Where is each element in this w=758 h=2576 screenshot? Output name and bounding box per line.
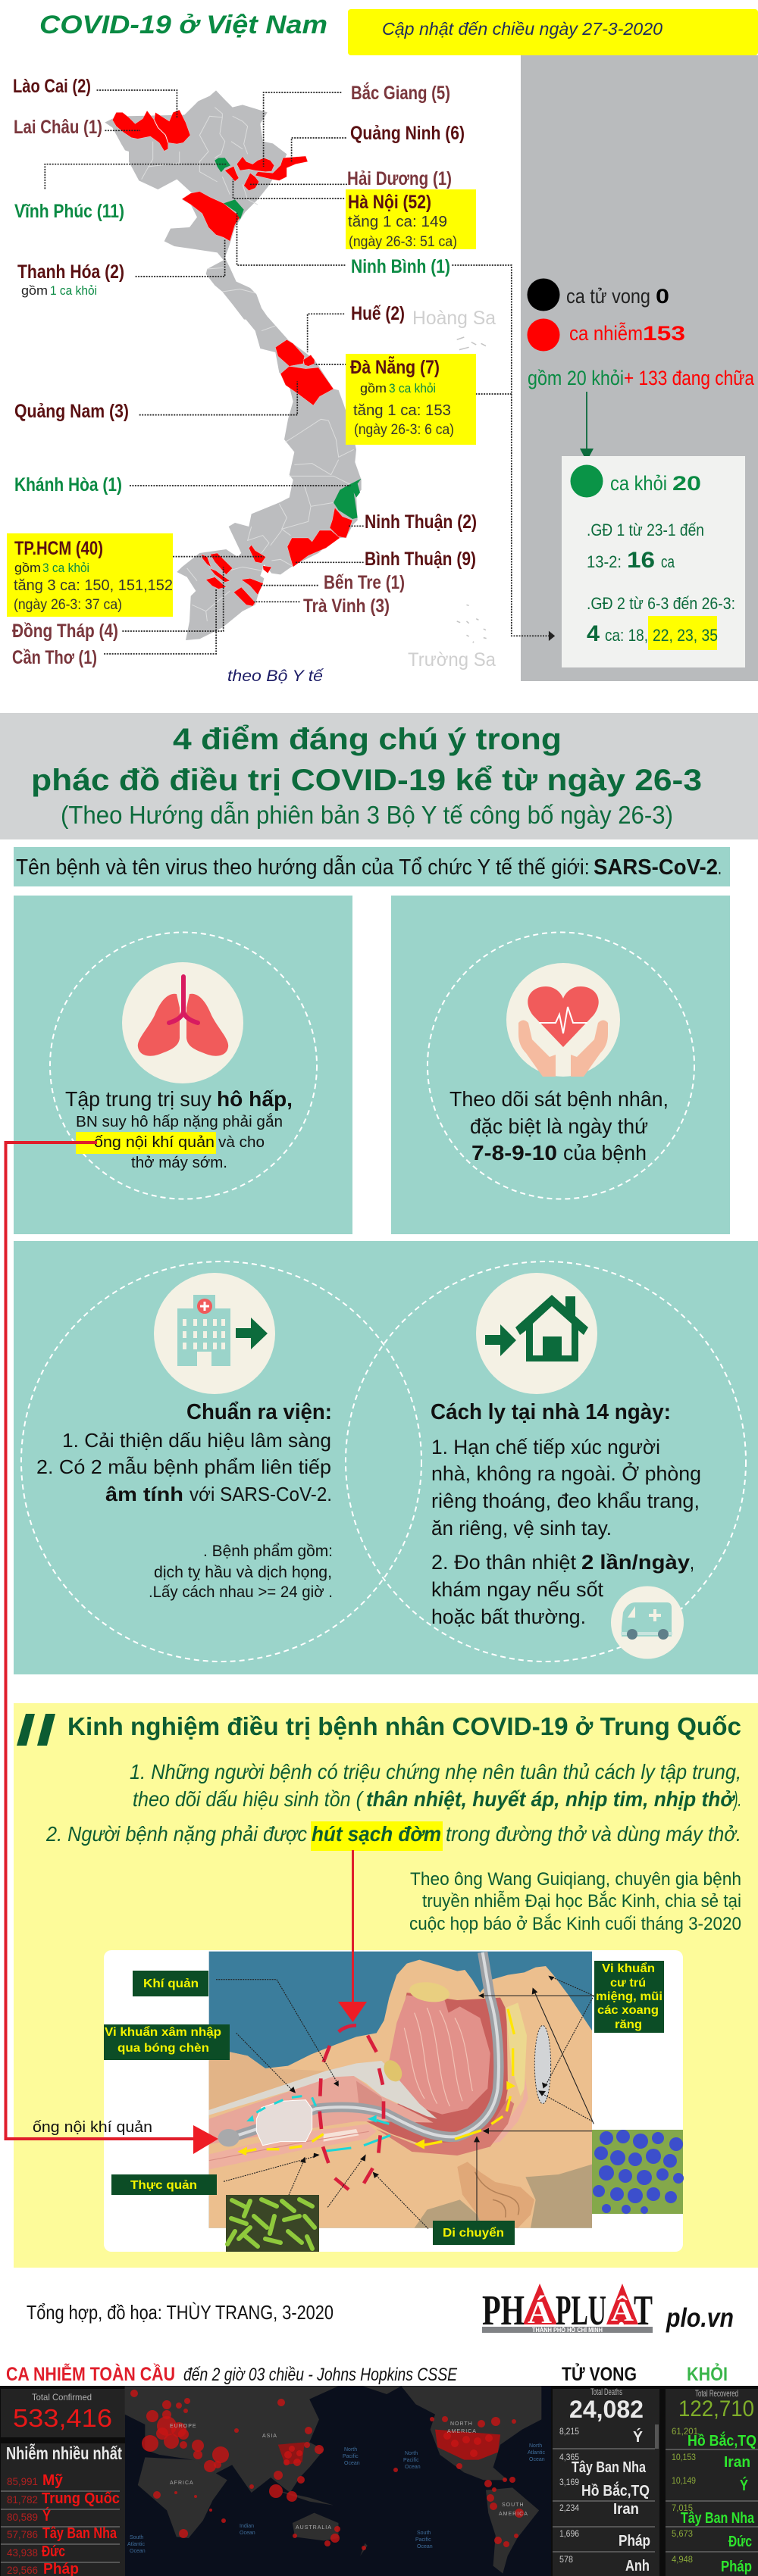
panel: most infected: Mỹ	[42, 2472, 64, 2489]
epiglottis and cartilage	[209, 2061, 437, 2119]
world map: SOUTH	[502, 2503, 525, 2508]
panel: total confirmed: 533,416	[13, 2404, 112, 2432]
callout: TP.HCM: tăng 3 ca: 150, 151,152	[14, 577, 173, 594]
panel: total recovered	[666, 2388, 758, 2576]
map of Vietnam: north	[105, 90, 308, 320]
label: Quảng Nam: Quảng Nam (3)	[14, 401, 129, 422]
callout: Đà Nẵng: tăng 1 ca: 153	[353, 402, 451, 419]
label: Bắc Giang: Bắc Giang (5)	[351, 81, 450, 104]
world map: NORTH	[450, 2421, 473, 2427]
label: Vi khuẩn cư trú: miệng, mũi	[596, 1990, 662, 2003]
world map: Ocean	[529, 2457, 545, 2462]
text: discharge standard: .Lấy cách nhau >= 24 giờ .	[149, 1583, 333, 1601]
text: discharge standard: Chuẩn ra viện:	[186, 1400, 332, 1424]
label: Di chuyển: Di chuyển	[443, 2226, 504, 2240]
panel: total deaths: Iran	[613, 2501, 639, 2518]
text: respiratory failure: và cho	[218, 1134, 265, 1151]
logo: Pháp Luật: Á	[528, 2295, 553, 2331]
text: monitoring: 7-8-9-10	[471, 1141, 557, 1165]
logo: Pháp Luật: THÀNH PHỐ HỒ CHÍ MINH	[532, 2326, 603, 2334]
callout: TP.HCM: (ngày 26-3: 37 ca)	[14, 597, 122, 613]
panel: recovered cases: 13-2:	[587, 552, 622, 571]
panel: total confirmed: Total Confirmed	[32, 2392, 92, 2402]
label: Ninh Bình: Ninh Bình (1)	[351, 256, 450, 277]
text: respiratory failure	[65, 1087, 293, 1171]
text: discharge standard: 2. Có 2 mẫu bệnh phẩm liên tiếp	[36, 1455, 331, 1478]
label: Khí quản	[133, 1971, 208, 1996]
diagram: airway anatomy	[209, 1952, 594, 2229]
label: Vi khuẩn cư trú: cư trú	[610, 1977, 646, 1990]
callout: Đà Nẵng: 3 ca khỏi	[389, 381, 436, 395]
panel: total deaths: 3,169	[559, 2477, 579, 2487]
logo: Pháp Luật: PH	[482, 2287, 525, 2334]
panel: recovered cases: .GĐ 2 từ 6-3 đến 26-3:	[587, 594, 735, 613]
panel: total deaths: 2,234	[559, 2503, 579, 2513]
logo: Pháp Luật: Ậ	[611, 2296, 634, 2327]
panel: most infected: 57,786	[7, 2528, 38, 2540]
icon: hospital with arrow	[177, 1295, 268, 1366]
icon: ambulance	[611, 1587, 684, 1659]
world map: South	[130, 2535, 143, 2540]
tube cuff	[256, 2100, 312, 2146]
label: Thanh Hóa	[17, 261, 124, 298]
icon: arrow into house	[485, 1295, 588, 1361]
label: Vi khuẩn cư trú: răng	[615, 2018, 642, 2031]
world map: AMERICA	[447, 2429, 477, 2434]
text: monitoring: của bệnh	[563, 1141, 647, 1165]
label: Vi khuẩn cư trú: Vi khuẩn	[602, 1962, 655, 1975]
callout: TP.HCM: gồm	[14, 561, 41, 575]
world map: North	[344, 2447, 357, 2453]
panel: most infected: 81,782	[7, 2493, 38, 2506]
title: COVID-19 ở Việt Nam	[39, 11, 327, 39]
pointer lines	[216, 1976, 594, 2229]
world map: Ocean	[130, 2549, 146, 2554]
panel: most infected: Tây Ban Nha	[42, 2525, 117, 2542]
panel: total recovered: 10,153	[672, 2452, 696, 2462]
world map: North	[529, 2443, 542, 2449]
callout: Đà Nẵng: gồm	[360, 381, 387, 395]
panel: recovered cases	[562, 456, 745, 667]
world map: Atlantic	[127, 2542, 145, 2547]
label: Trà Vinh: Trà Vinh (3)	[303, 596, 390, 617]
panel: total deaths: Ý	[633, 2428, 644, 2446]
world map: ASIA	[262, 2434, 277, 2439]
image: blue bacteria	[592, 2130, 684, 2214]
update date banner	[348, 9, 758, 55]
label: Cần Thơ: Cần Thơ (1)	[12, 647, 97, 668]
panel: total recovered: Ý	[740, 2476, 749, 2494]
panel: recovered cases: 16	[627, 548, 655, 573]
grey side panel	[521, 55, 758, 681]
panel: most infected	[1, 2443, 125, 2576]
text: source expert: truyền nhiễm Đại học Bắc Kinh, chia sẻ tại	[422, 1891, 741, 1912]
teal bar: disease name: Tên bệnh và tên virus theo hướng dẫn của Tổ chức Y tế thế giới:	[16, 855, 590, 880]
text: home isolation: nhà, không ra ngoài. Ở phòng	[431, 1461, 701, 1485]
panel: total recovered: 5,673	[672, 2528, 693, 2539]
label: Vi khuẩn xâm nhập	[104, 2024, 230, 2060]
case breakdown	[528, 367, 755, 389]
panel: most infected: Trung Quốc	[42, 2490, 120, 2507]
logo: Pháp Luật: PLU	[556, 2287, 606, 2334]
text: home isolation	[431, 1400, 701, 1628]
teal bar: disease name: .	[718, 855, 722, 880]
text: home isolation: hoặc bất thường.	[431, 1605, 586, 1628]
panel: most infected: Nhiễm nhiều nhất	[6, 2443, 122, 2463]
label: Vi khuẩn xâm nhập: Vi khuẩn xâm nhập	[105, 2025, 221, 2039]
text: home isolation: 2. Đo thân nhiệt	[431, 1551, 576, 1574]
arrow: to recovered box	[580, 392, 594, 461]
panel: most infected: Đức	[42, 2543, 65, 2560]
panel: total recovered: 10,149	[672, 2475, 696, 2486]
tongue	[389, 1995, 490, 2115]
arrow: red line from suction text to diagram	[338, 1850, 367, 2022]
legend: deaths	[528, 279, 669, 311]
text: home isolation: ,	[690, 1551, 694, 1574]
panel: most infected: 43,938	[7, 2546, 38, 2559]
world map	[125, 2386, 551, 2576]
label: Bình Thuận: Bình Thuận (9)	[365, 549, 476, 570]
world map: North	[405, 2451, 418, 2456]
image: green bacteria	[226, 2195, 319, 2252]
panel: total recovered: 4,948	[672, 2554, 693, 2565]
text: discharge standard: âm tính	[105, 1483, 183, 1505]
panel: recovered cases: .GĐ 1 từ 23-1 đến	[587, 521, 704, 539]
text: recommendations	[45, 1760, 741, 1851]
callout: TP.HCM: 3 ca khỏi	[42, 561, 89, 575]
panel: patient monitoring	[391, 896, 730, 1234]
label: Trường Sa: Trường Sa	[408, 649, 496, 671]
world map: South	[417, 2531, 431, 2536]
panel: recovered cases: 20	[672, 472, 701, 495]
label: Khánh Hòa: Khánh Hòa (1)	[14, 474, 122, 496]
red dashed suction ring	[320, 2025, 384, 2190]
callout: Hà Nội: Hà Nội (52)	[348, 192, 431, 213]
hair	[415, 2165, 592, 2228]
label: Huế: Huế (2)	[351, 303, 405, 324]
panel: total deaths: Pháp	[619, 2533, 650, 2549]
panel: respiratory treatment	[14, 896, 352, 1234]
panel: total deaths: Anh	[625, 2558, 650, 2574]
text: recommendations: 2. Người bệnh nặng phải được	[45, 1822, 307, 1846]
text: discharge standard: với SARS-CoV-2.	[190, 1483, 332, 1505]
text: discharge standard: 1. Cải thiện dấu hiệu lâm sàng	[62, 1429, 331, 1452]
yellow flow arrows	[246, 2009, 514, 2151]
world map: Pacific	[343, 2454, 359, 2459]
callout: TP.HCM: TP.HCM (40)	[14, 538, 103, 559]
world map: AUSTRALIA	[296, 2525, 332, 2531]
panel: total recovered: Iran	[724, 2454, 750, 2471]
panel: recovered cases: ca khỏi	[610, 472, 667, 495]
panel: recovered cases: ca	[661, 552, 675, 571]
text: respiratory failure: Tập trung trị suy	[65, 1087, 211, 1111]
panel: total deaths: 8,215	[559, 2426, 579, 2437]
panel: total recovered: Pháp	[721, 2559, 752, 2575]
label: Ninh Thuận: Ninh Thuận (2)	[365, 511, 477, 533]
panel: Vietnam map section	[7, 9, 758, 685]
callout: TP.HCM	[7, 533, 173, 617]
panel: total deaths: Total Deaths	[590, 2387, 622, 2397]
label: Đồng Tháp: Đồng Tháp (4)	[12, 621, 118, 642]
callout: Hà Nội	[346, 189, 476, 250]
credit line: Tổng hợp, đồ họa: THÙY TRANG, 3-2020	[27, 2301, 334, 2324]
world map: Pacific	[415, 2537, 431, 2543]
text: home isolation: khám ngay nếu sốt	[431, 1578, 603, 1601]
text: respiratory failure: BN suy hô hấp nặng phải gắn	[76, 1113, 283, 1130]
logo: Pháp Luật: T	[634, 2287, 653, 2334]
panel: total deaths: Hồ Bắc,TQ	[581, 2481, 650, 2499]
panel: discharge and home isolation	[14, 1241, 758, 1674]
panel: total deaths: 578	[559, 2554, 573, 2565]
panel: most infected: 85,991	[7, 2475, 38, 2487]
sinus	[534, 2025, 551, 2104]
world map: Indian	[240, 2524, 254, 2529]
text: recommendations: thân nhiệt, huyết áp, nhịp tim, nhịp thở	[366, 1787, 736, 1811]
text: recommendations: ).	[732, 1787, 741, 1811]
world map: Ocean	[405, 2465, 421, 2470]
case breakdown: gồm 20 khỏi	[528, 367, 624, 389]
label: Thực quản: Thực quản	[130, 2179, 197, 2192]
world map: Ocean	[240, 2531, 255, 2536]
map of Vietnam: south	[177, 317, 362, 640]
label: Quảng Ninh: Quảng Ninh (6)	[350, 123, 465, 144]
text: recommendations: hút sạch đờm	[312, 1822, 441, 1846]
icon: heart in hands	[518, 986, 608, 1077]
text: monitoring: Theo dõi sát bệnh nhân,	[449, 1087, 669, 1111]
heading: global cases	[6, 2362, 728, 2385]
callout: Hà Nội: tăng 1 ca: 149	[348, 214, 447, 230]
source note: theo Bộ Y tế	[227, 667, 324, 685]
label: Thực quản	[111, 2174, 217, 2195]
panel: most infected: 80,589	[7, 2511, 38, 2523]
text: respiratory failure: ống nội khí quản	[94, 1134, 215, 1151]
label: Lào Cai: Lào Cai (2)	[13, 76, 91, 97]
panel: recovered cases: 22, 23, 35	[653, 626, 718, 645]
label: Hải Dương: Hải Dương (1)	[347, 168, 452, 189]
panel: total deaths	[553, 2387, 659, 2576]
ear	[457, 2162, 534, 2228]
text: source expert	[409, 1869, 741, 1934]
heading band: 4 key points: phác đồ điều trị COVID-19 kể từ ngày 26-3	[31, 764, 702, 797]
trachea lumen	[209, 2076, 434, 2144]
esophagus	[209, 2124, 377, 2169]
text: monitoring: đặc biệt là ngày thứ	[470, 1114, 648, 1138]
world map: Atlantic	[528, 2450, 545, 2456]
map labels	[7, 76, 496, 685]
panel: total recovered: Đức	[728, 2534, 752, 2550]
teal bar: disease name: SARS-CoV-2	[594, 855, 718, 880]
panel: recovered cases: 4	[587, 621, 600, 646]
world map: EUROPE	[170, 2424, 197, 2429]
spine and palate	[506, 2002, 527, 2096]
heading: global cases: CA NHIỄM TOÀN CẦU	[6, 2362, 175, 2385]
text: respiratory failure: thở máy sớm.	[131, 1155, 227, 1171]
panel: China treatment experience	[14, 1703, 758, 2268]
legend: infected: 153	[643, 322, 685, 345]
arrow: red line from tube text to diagram	[6, 1143, 218, 2154]
callout: Hà Nội: (ngày 26-3: 51 ca)	[349, 234, 457, 250]
logo: plo.vn: plo.vn	[666, 2303, 734, 2333]
panel: total deaths: 4,365	[559, 2452, 579, 2462]
text: home isolation: ăn riêng, vệ sinh tay.	[431, 1517, 612, 1540]
panel: total recovered: 7,015	[672, 2503, 693, 2513]
label: Vi khuẩn xâm nhập: qua bóng chèn	[117, 2042, 209, 2055]
label: Vi khuẩn cư trú: các xoang	[597, 2004, 659, 2017]
teal bar: disease name	[14, 847, 730, 886]
label: Thanh Hóa: gồm	[21, 283, 48, 298]
panel: total recovered: 61,201	[672, 2426, 698, 2437]
label: tube: ống nội khí quản	[33, 2119, 152, 2136]
dashboard: Johns Hopkins	[0, 2386, 758, 2576]
panel: total deaths: 1,696	[559, 2528, 579, 2539]
heading: global cases: TỬ VONG	[562, 2362, 637, 2385]
label: Lai Châu: Lai Châu (1)	[14, 117, 102, 138]
panel: total confirmed	[1, 2389, 125, 2437]
text: home isolation: riêng thoáng, đeo khẩu trang,	[431, 1490, 700, 1512]
callout: Đà Nẵng	[346, 354, 476, 445]
label: Di chuyển	[433, 2221, 515, 2245]
heading: global cases: đến 2 giờ 03 chiều - Johns Hopkins CSSE	[183, 2365, 458, 2385]
world map: AFRICA	[170, 2481, 194, 2486]
legend: infected: ca nhiễm	[569, 321, 643, 345]
heading band: 4 key points: 4 điểm đáng chú ý trong	[173, 723, 562, 756]
text: source expert: Theo ông Wang Guiqiang, chuyên gia bệnh	[410, 1869, 741, 1890]
text: discharge standard: dịch tỵ hầu và dịch họng,	[154, 1564, 332, 1581]
legend: deaths: ca tử vong	[566, 285, 650, 308]
text: discharge standard	[36, 1400, 333, 1601]
icon: lungs	[138, 977, 228, 1056]
icon: quote marks	[17, 1714, 55, 1746]
legend: deaths: 0	[656, 285, 669, 308]
text: home isolation: 2 lần/ngày	[581, 1551, 690, 1574]
label: Hoàng Sa: Hoàng Sa	[412, 308, 496, 329]
heading band: 4 key points	[0, 713, 758, 839]
legend: infected	[528, 318, 685, 352]
text: discharge standard: . Bệnh phẩm gồm:	[203, 1543, 333, 1560]
panel: total deaths: Tây Ban Nha	[572, 2459, 647, 2476]
text: recommendations: theo dõi dấu hiệu sinh tồn (	[133, 1787, 364, 1811]
panel: most infected: 29,566	[7, 2564, 38, 2576]
label: Vĩnh Phúc: Vĩnh Phúc (11)	[14, 201, 124, 222]
label: Khí quản: Khí quản	[143, 1977, 199, 1990]
world map: Ocean	[417, 2544, 433, 2549]
throat cavity	[366, 1993, 508, 2146]
update date banner: Cập nhật đến chiều ngày 27-3-2020	[382, 19, 662, 39]
text: monitoring	[449, 1087, 669, 1165]
label: Thanh Hóa: 1 ca khỏi	[50, 283, 97, 298]
text: home isolation: 1. Hạn chế tiếp xúc người	[431, 1436, 660, 1458]
panel: recovered cases: ca: 18,	[605, 626, 648, 645]
callout: Đà Nẵng: Đà Nẵng (7)	[350, 355, 440, 378]
panel: total deaths: 24,082	[569, 2396, 644, 2423]
diagram card	[104, 1950, 683, 2252]
heading: Kinh nghiệm điều trị bệnh nhân COVID-19 ở Trung Quốc	[67, 1712, 741, 1740]
heading: global cases: KHỎI	[687, 2362, 728, 2385]
leader lines and islands	[45, 90, 555, 654]
logo: Pháp Luật	[482, 2284, 653, 2334]
label: Vi khuẩn cư trú	[594, 1961, 664, 2033]
cyan flow arrows	[256, 2096, 390, 2151]
world map: Ocean	[344, 2461, 360, 2466]
label: Thanh Hóa: Thanh Hóa (2)	[17, 261, 124, 283]
text: source expert: cuộc họp báo ở Bắc Kinh cuối tháng 3-2020	[409, 1914, 741, 1934]
panel: most infected: Ý	[42, 2506, 52, 2524]
heading band: 4 key points: (Theo Hướng dẫn phiên bản 3 Bộ Y tế công bố ngày 26-3)	[61, 801, 673, 829]
world map: Pacific	[403, 2458, 419, 2463]
endotracheal tube	[230, 1952, 499, 2138]
text: respiratory failure: hô hấp,	[217, 1087, 293, 1111]
callout: Đà Nẵng: (ngày 26-3: 6 ca)	[354, 422, 454, 438]
world map: AMERICA	[499, 2512, 528, 2517]
label: Bến Tre: Bến Tre (1)	[324, 572, 405, 593]
text: home isolation: Cách ly tại nhà 14 ngày:	[431, 1400, 671, 1424]
